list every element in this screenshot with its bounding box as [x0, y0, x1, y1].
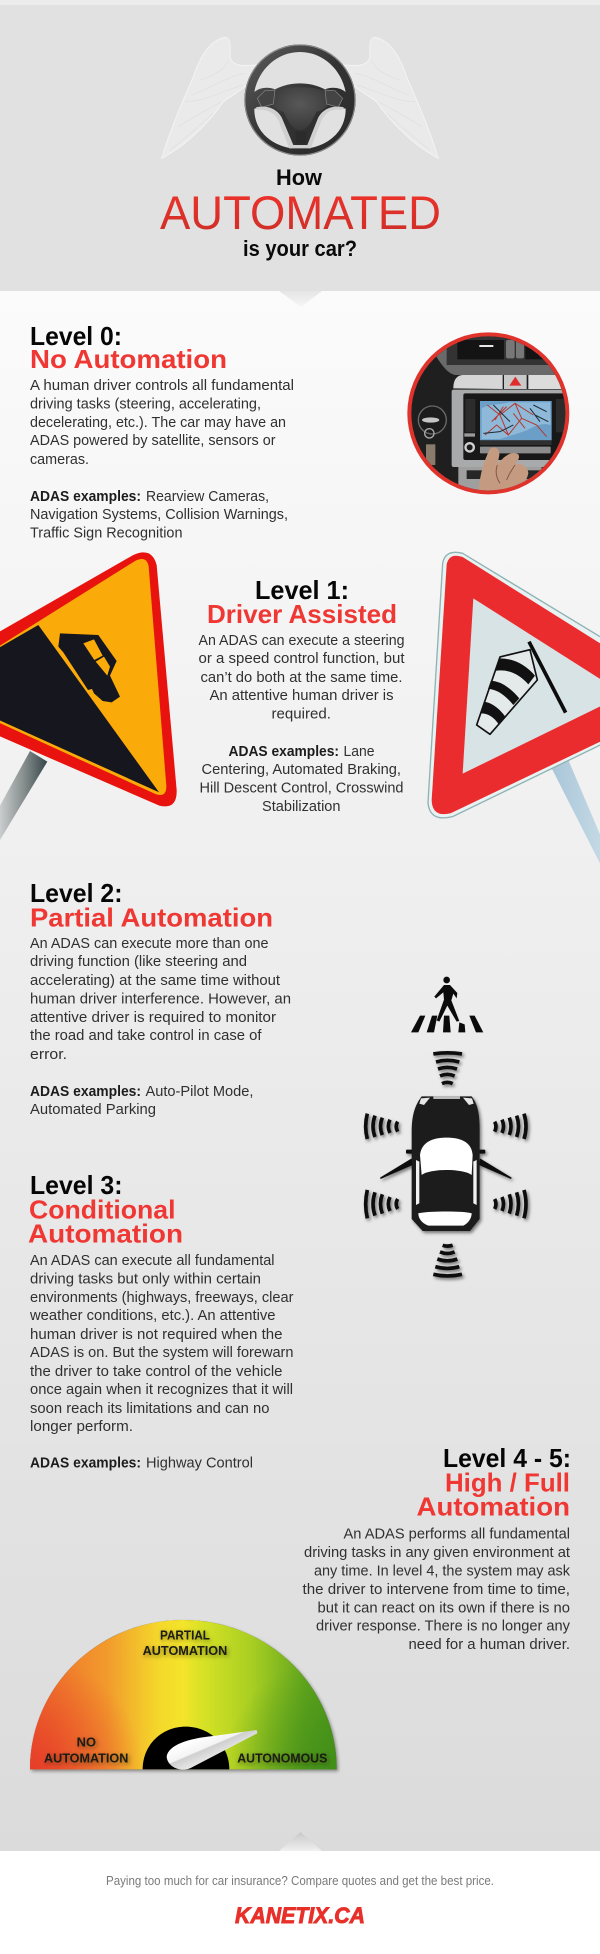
text: level 4-5 description: An ADAS performs all fundamental — [344, 1526, 570, 1542]
text: level 1 description — [198, 633, 404, 722]
text: level 3 description: the driver to take control of the vehicle — [30, 1364, 282, 1380]
label: no automation: AUTOMATION — [44, 1751, 128, 1765]
icon: winged steering wheel — [162, 37, 438, 158]
vehicle pictogram — [58, 633, 120, 702]
icon: front sensor waves — [433, 1053, 462, 1084]
icon: rear sensor waves — [433, 1245, 462, 1276]
heading: level 2: Level 2: — [30, 878, 122, 908]
gauge dial — [20, 1620, 340, 1770]
icon: left wing — [162, 37, 258, 158]
text: level 2 ADAS examples: Auto-Pilot Mode, — [146, 1084, 254, 1100]
icon: steering wheel — [244, 44, 356, 156]
text: level 2 ADAS examples: Automated Parking — [30, 1102, 156, 1118]
text: level 4-5 description: the driver to intervene from time to time, — [302, 1582, 570, 1598]
text: level 0 ADAS examples: Navigation Systems, Collision Warnings, — [30, 507, 288, 523]
gauge needle — [167, 1730, 257, 1770]
sign post — [552, 760, 600, 867]
panel: level 0 — [30, 321, 580, 542]
text: level 0 description: decelerating, etc.). The car may have an — [30, 415, 286, 431]
page background — [0, 291, 600, 1851]
text: level 3 description: once again when it recognizes that it will — [30, 1382, 293, 1398]
text: level 4-5 description: driving tasks in any given environment at — [304, 1545, 570, 1561]
text: level 3 description: human driver is not required when the — [30, 1327, 282, 1343]
panel: level 4-5 — [302, 1443, 571, 1653]
icon: car with sensors and pedestrian — [366, 977, 526, 1276]
text: level 3 ADAS examples: Highway Control — [146, 1456, 253, 1472]
text: level 3 description: environments (highways, freeways, clear — [30, 1290, 294, 1306]
text: level 2 description: driving function (like steering and — [30, 954, 247, 970]
text: level 2 description — [30, 936, 291, 1063]
heading: title — [160, 165, 441, 261]
heading: title: AUTOMATED — [160, 187, 441, 240]
icon: crosswind road sign — [428, 552, 600, 867]
chart: automation gauge — [20, 1620, 340, 1770]
text: level 2 description: attentive driver is required to monitor — [30, 1010, 276, 1026]
label: autonomous: AUTONOMOUS — [237, 1752, 327, 1766]
text: level 0 ADAS examples — [30, 489, 288, 542]
text: level 4-5 description — [302, 1526, 571, 1653]
panel: footer — [0, 1832, 600, 1954]
heading: title: How — [276, 165, 323, 190]
panel: level 3 — [28, 1170, 294, 1472]
heading: level 3: Conditional — [29, 1194, 176, 1224]
label: no automation — [44, 1736, 128, 1765]
heading: level 3: Level 3: — [30, 1170, 122, 1200]
icon: left front sensor waves — [366, 1114, 398, 1139]
text: level 3 description — [29, 1253, 294, 1435]
text: level 1 ADAS examples — [200, 744, 404, 815]
gauge hub — [143, 1727, 229, 1769]
text: level 1 description: can’t do both at the same time. — [200, 670, 402, 686]
text: level 0 ADAS examples: Rearview Cameras, — [146, 489, 269, 505]
text: level 1 ADAS examples: Hill Descent Control, Crosswind — [200, 780, 404, 796]
text: level 1 ADAS examples: ADAS examples: — [228, 744, 339, 760]
text: level 4-5 description: need for a human driver. — [408, 1637, 570, 1653]
label: partial automation: PARTIAL — [160, 1628, 210, 1642]
label: partial automation: AUTOMATION — [143, 1644, 227, 1658]
text: level 3 description: ADAS is on. But the system will forewarn — [30, 1345, 294, 1361]
text: level 1 description: or a speed control function, but — [198, 651, 404, 667]
heading: level 4-5: High / Full — [445, 1468, 570, 1498]
icon: pedestrian on crosswalk — [411, 977, 483, 1032]
heading: title: is your car? — [243, 236, 357, 261]
label: no automation: NO — [77, 1736, 96, 1750]
text: level 2 description: error. — [30, 1047, 67, 1063]
text: level 1 description: required. — [272, 706, 331, 722]
text: level 1 ADAS examples: Lane — [344, 744, 374, 760]
text: level 2 description: An ADAS can execute more than one — [30, 936, 268, 952]
windsock pictogram — [477, 650, 537, 734]
text: level 1 ADAS examples: Stabilization — [262, 799, 340, 815]
text: level 2 description: human driver interference. However, an — [30, 992, 291, 1008]
arrow: footer pointer — [279, 1832, 322, 1851]
heading: level 0: No Automation — [30, 344, 227, 374]
text: level 4-5 description: any time. In level 4, the system may ask — [314, 1564, 571, 1580]
text: level 3 description: driving tasks but only within certain — [30, 1272, 261, 1288]
text: level 3 description: An ADAS can execute all fundamental — [30, 1253, 274, 1269]
logo: kanetix: KANETIX.CA — [235, 1903, 365, 1928]
text: level 3 description: longer perform. — [30, 1419, 133, 1435]
text: level 3 ADAS examples: ADAS examples: — [30, 1456, 141, 1472]
heading: level 2 — [30, 878, 273, 932]
text: call to action: Paying too much for car insurance? Compare quotes and get the best price. — [106, 1874, 494, 1888]
text: level 1 ADAS examples: Centering, Automated Braking, — [202, 762, 401, 778]
heading: level 0: Level 0: — [30, 321, 122, 351]
text: level 0 description — [30, 378, 294, 468]
text: level 2 description: accelerating) at the same time without — [30, 973, 280, 989]
heading: level 4-5 — [416, 1443, 571, 1522]
sign post — [0, 751, 47, 840]
heading: level 2: Partial Automation — [30, 902, 273, 932]
panel: header — [0, 0, 600, 307]
label: partial automation — [143, 1628, 227, 1658]
heading: level 1: Level 1: — [255, 575, 349, 605]
text: level 0 description: cameras. — [30, 452, 89, 468]
text: level 2 description: the road and take control in case of — [30, 1028, 262, 1044]
text: level 0 description: A human driver controls all fundamental — [30, 378, 294, 394]
text: level 0 description: ADAS powered by satellite, sensors or — [30, 433, 276, 449]
icon: right front sensor waves — [495, 1114, 526, 1139]
icon: right rear sensor waves — [495, 1190, 526, 1218]
text: level 2 ADAS examples: ADAS examples: — [30, 1084, 141, 1100]
text: level 2 ADAS examples — [30, 1084, 254, 1118]
heading: level 3: Automation — [28, 1218, 183, 1248]
text: level 0 ADAS examples: Traffic Sign Recognition — [30, 526, 182, 542]
text: level 3 description: soon reach its limitations and can no — [30, 1401, 270, 1417]
heading: level 1 — [207, 575, 397, 629]
panel: level 1 — [0, 552, 600, 867]
icon: navigation system photo — [407, 332, 570, 494]
heading: level 4-5: Automation — [416, 1492, 570, 1522]
heading: level 1: Driver Assisted — [207, 599, 397, 629]
text: level 4-5 description: but it can react on its own if there is no — [318, 1600, 570, 1616]
panel: level 2 — [30, 878, 291, 1118]
icon: steep hill road sign — [0, 552, 177, 840]
text: level 0 description: driving tasks (steering, accelerating, — [30, 396, 261, 412]
text: level 1 description: An attentive human driver is — [210, 688, 394, 704]
text: level 1 description: An ADAS can execute a steering — [198, 633, 404, 649]
heading: level 0 — [30, 321, 227, 374]
icon: right wing — [342, 37, 438, 158]
arrow: header pointer — [279, 291, 322, 307]
text: level 0 ADAS examples: ADAS examples: — [30, 489, 141, 505]
icon: left rear sensor waves — [366, 1190, 398, 1218]
text: level 3 description: weather conditions, etc.). An attentive — [29, 1308, 276, 1324]
text: level 3 ADAS examples — [30, 1456, 253, 1472]
heading: level 4-5: Level 4 - 5: — [443, 1443, 571, 1473]
icon: car top view — [380, 1096, 512, 1231]
text: level 4-5 description: driver response. There is no longer any — [316, 1618, 571, 1634]
heading: level 3 — [28, 1170, 183, 1248]
